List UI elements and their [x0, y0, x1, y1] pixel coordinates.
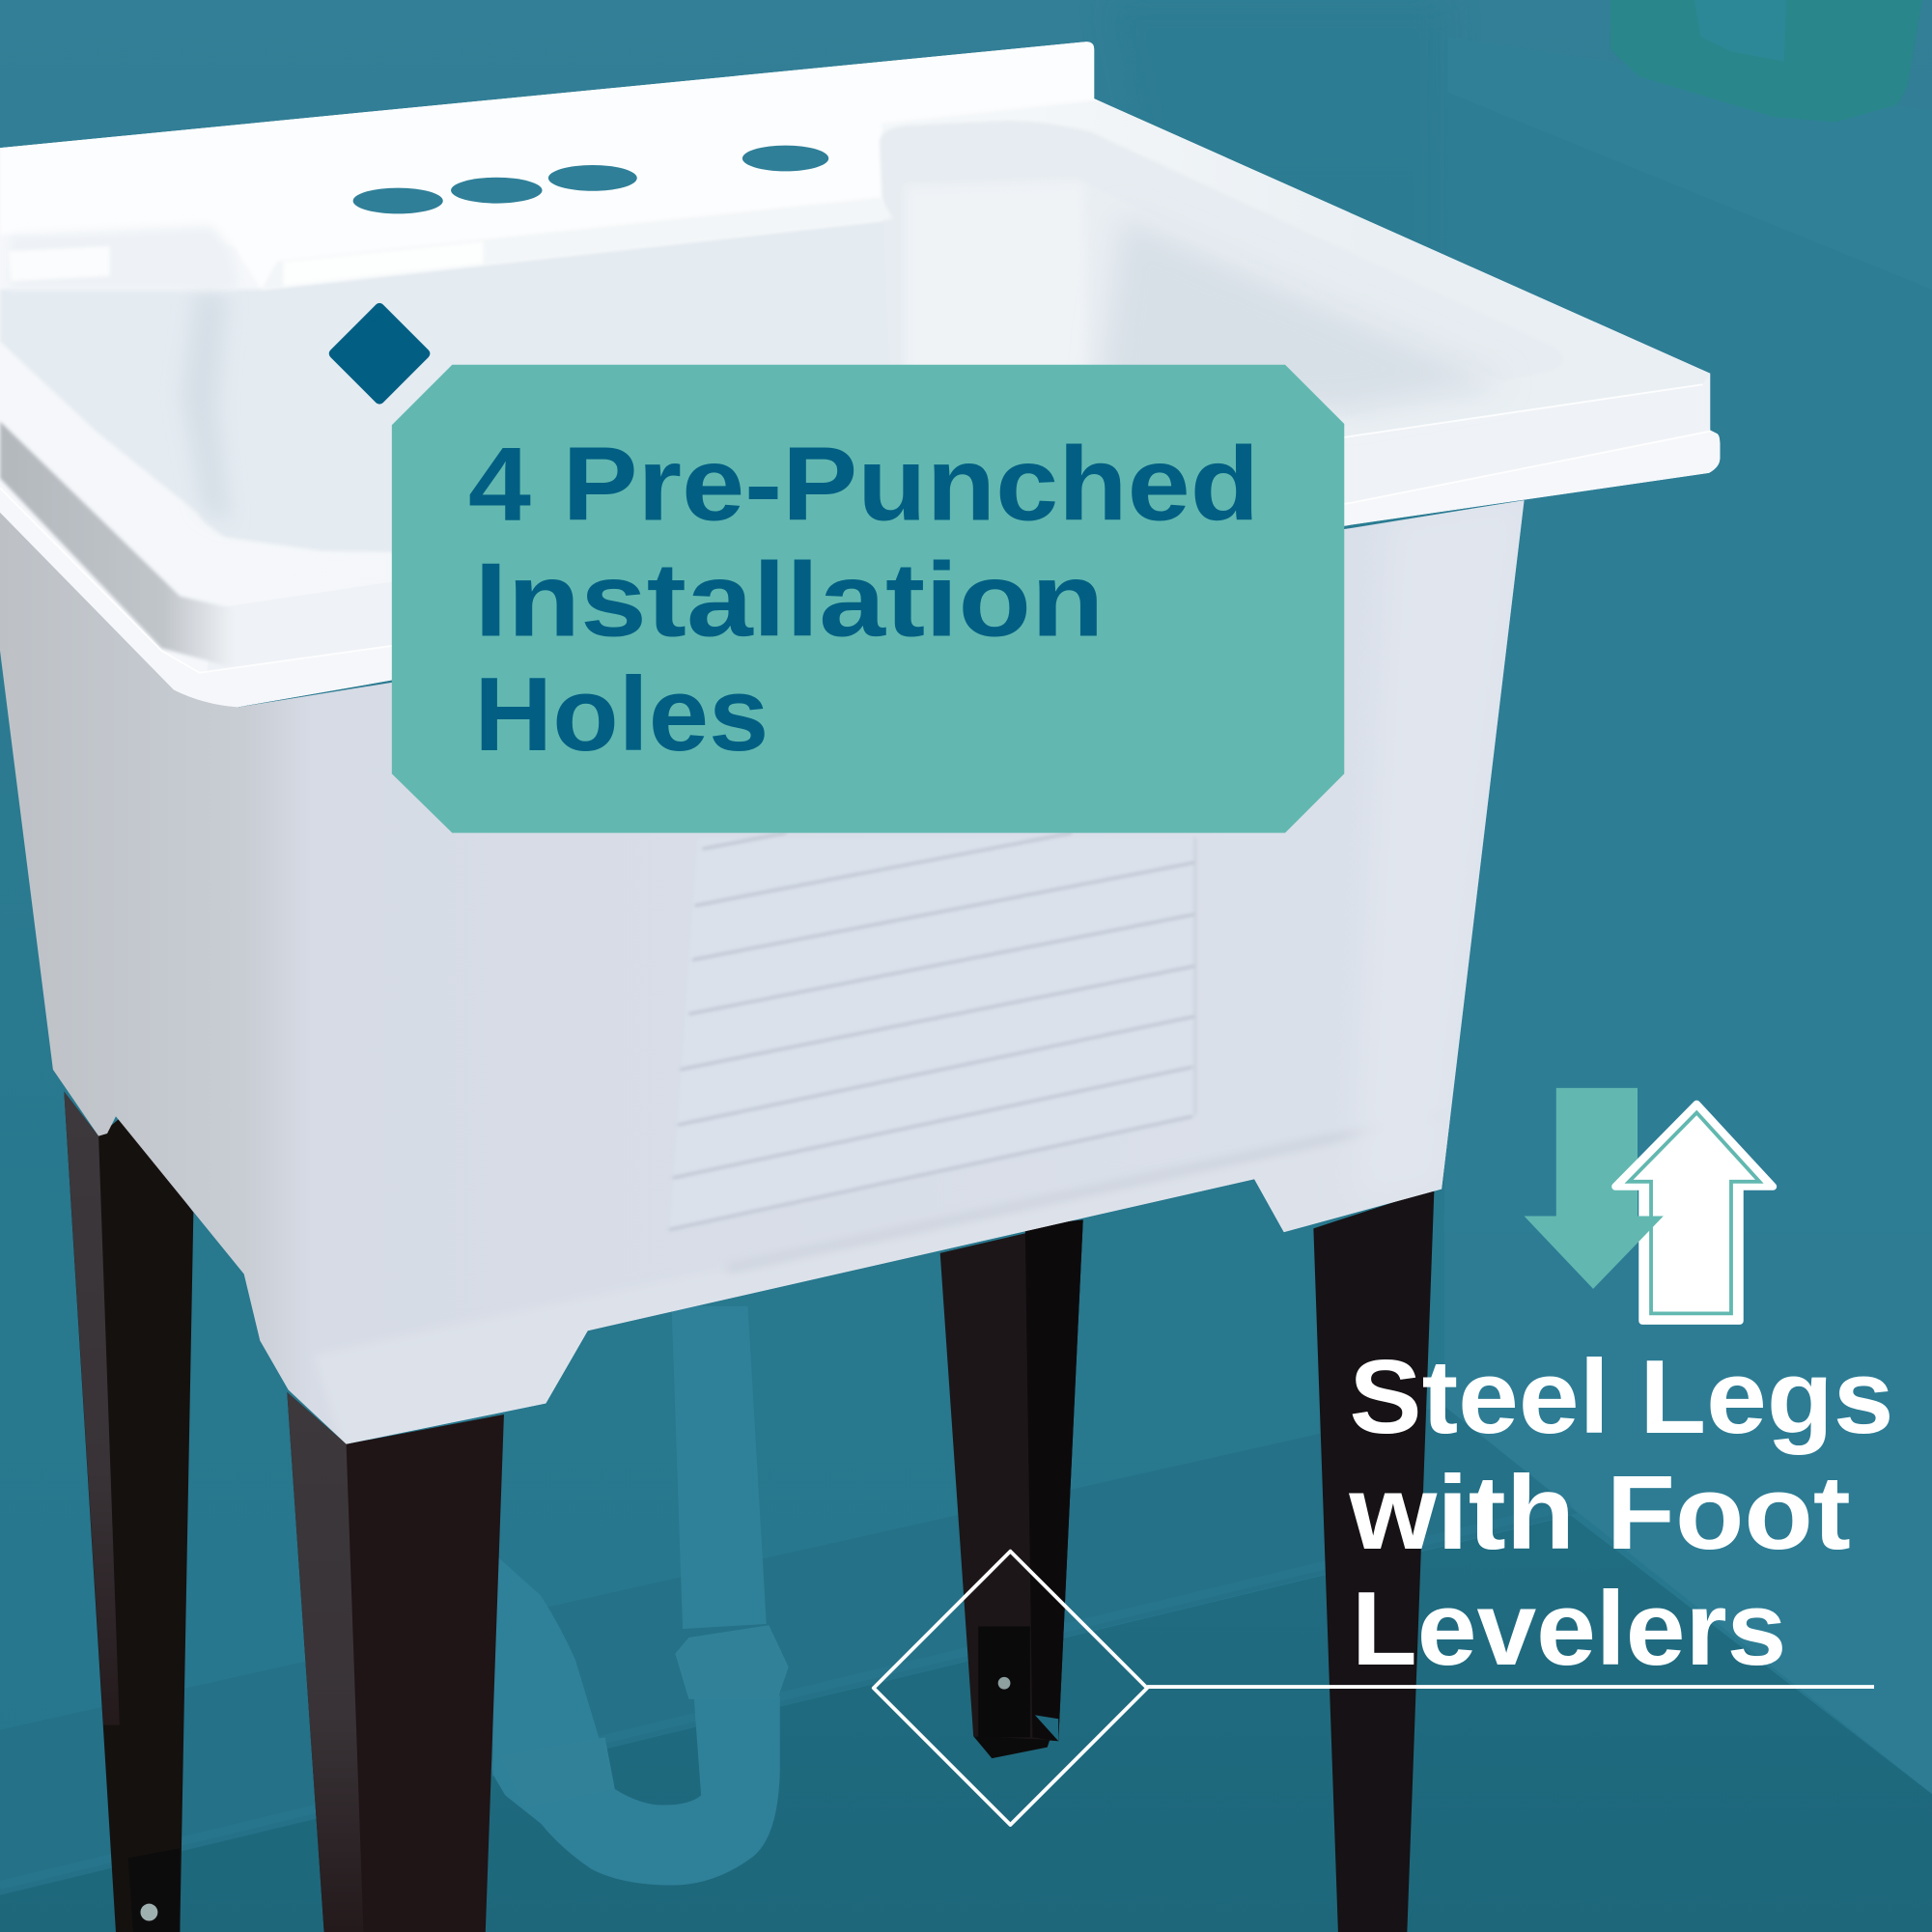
installation holes [353, 146, 828, 213]
sink rim and deck [0, 25, 1721, 708]
leg: front [287, 1392, 504, 1932]
callout heading: Installation [474, 541, 1104, 658]
heading: steel legs [1348, 1338, 1893, 1687]
louvered panel [669, 833, 1195, 1230]
leg: rear middle with foot leveler [940, 1219, 1083, 1758]
heading: steel legs: with Foot [1348, 1454, 1851, 1571]
callout: pre-punched holes [392, 365, 1344, 833]
callout heading: Holes [474, 656, 769, 772]
callout marker: foot leveler outline and leader line [874, 1552, 1874, 1825]
icon: up and down arrows [1525, 1088, 1773, 1321]
sink tub body [0, 500, 1525, 1454]
background bottle [1610, 0, 1922, 122]
heading: steel legs: Steel Legs [1349, 1338, 1893, 1455]
sink basin interior [0, 121, 1563, 552]
leg: far left [64, 1092, 193, 1932]
callout heading [468, 426, 1259, 772]
callout heading: 4 Pre-Punched [468, 426, 1259, 543]
heading: steel legs: Levelers [1352, 1570, 1786, 1687]
background drain pipe [492, 1306, 789, 1886]
leg: right [1313, 1189, 1434, 1932]
callout marker diamond [334, 308, 425, 399]
